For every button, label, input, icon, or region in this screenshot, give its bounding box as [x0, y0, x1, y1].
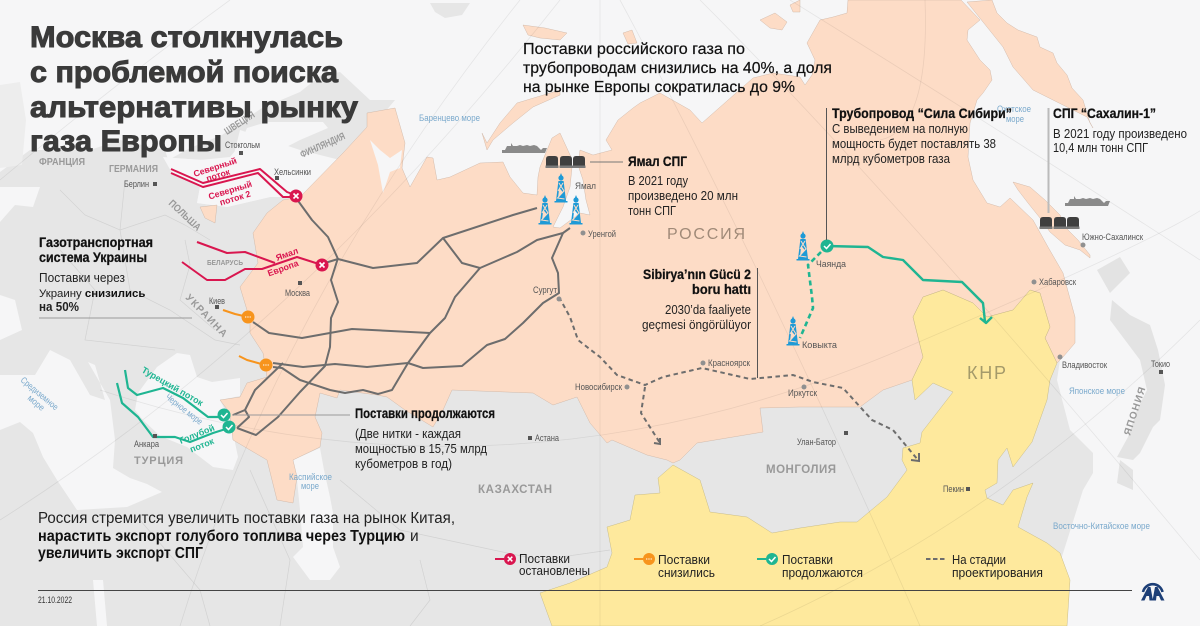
footer rule	[38, 590, 1132, 592]
sea labels: море	[26, 393, 47, 413]
icon: Yamal LNG tanks	[546, 156, 586, 168]
callout: Ukraine gas transport system: Поставки через	[39, 271, 125, 285]
callout: Sakhalin-1 LNG: СПГ “Сахалин-1”	[1053, 105, 1156, 121]
callout: Power of Siberia: Трубопровод “Сила Сибири”	[832, 105, 1012, 121]
status marker: Nord Stream stopped	[290, 190, 302, 202]
country and city labels: Астана	[535, 433, 559, 443]
country and city labels: РОССИЯ	[667, 226, 745, 243]
logo: Anadolu Agency	[1141, 584, 1164, 600]
title: альтернативы рынку	[30, 91, 358, 124]
sea labels	[19, 104, 1150, 531]
country and city labels: ТУРЦИЯ	[134, 455, 183, 467]
callout: Power of Siberia 2: Sibirya’nın Gücü 2	[643, 266, 751, 282]
country and city labels: Токио	[1151, 359, 1170, 369]
status marker: Yamal-Europe stopped	[316, 258, 328, 272]
headline statement on European market: трубопроводам снизились на 40%, а доля	[523, 60, 832, 77]
callout: Sakhalin-1 LNG	[1048, 105, 1187, 213]
callout: Power of Siberia 2	[642, 266, 758, 378]
sea labels: Средиземное	[19, 375, 60, 412]
callout: Power of Siberia: млрд кубометров газа	[832, 152, 950, 166]
headline statement on European market: Поставки российского газа по	[523, 41, 745, 58]
legend: supplies reduced	[634, 552, 715, 580]
callout: Power of Siberia	[826, 105, 1012, 240]
headline statement on European market: на рынке Европы сократилась до 9%	[523, 79, 795, 96]
sea labels: Каспийское	[289, 472, 332, 482]
country and city labels: Хельсинки	[274, 167, 311, 177]
country and city labels: Новосибирск	[575, 382, 622, 392]
status marker: Blue Stream continues	[222, 420, 236, 434]
gas pipelines network	[233, 198, 570, 435]
country and city labels: Москва	[285, 288, 310, 298]
country and city labels: Улан-Батор	[797, 437, 836, 447]
legend: supplies stopped: Поставки	[519, 551, 570, 566]
country and city labels: Владивосток	[1062, 360, 1107, 370]
icon: Sakhalin LNG tanks	[1040, 217, 1080, 229]
pipeline label: Nord Stream: поток	[205, 166, 232, 184]
icons: Yamal gas rigs	[538, 173, 582, 224]
pipeline label: Yamal-Europe: Ямал	[274, 246, 300, 263]
summary text block	[38, 510, 455, 562]
country and city labels: ЯПОНИЯ	[1122, 386, 1148, 437]
country and city labels: Анкара	[134, 439, 159, 449]
callout: Sakhalin-1 LNG: В 2021 году произведено	[1053, 127, 1187, 141]
country and city labels: Уренгой	[588, 229, 616, 239]
country and city labels: Южно-Сахалинск	[1082, 232, 1143, 242]
legend: design stage	[926, 552, 1043, 580]
country and city labels: Сургут	[533, 285, 557, 295]
legend: supplies stopped: остановлены	[519, 563, 590, 578]
status marker: Ukraine reduced south	[260, 358, 272, 372]
country and city labels: ФРАНЦИЯ	[39, 157, 85, 168]
country and city labels: КНР	[967, 363, 1006, 383]
Yamal-Europe pipelines	[182, 242, 322, 280]
callout: Yamal LNG: В 2021 году	[628, 174, 689, 188]
pipeline label: Blue Stream: Голубой	[178, 423, 216, 446]
callout: Ukraine gas transport system: на 50%	[39, 300, 79, 314]
callout: Ukraine gas transport system: система Украины	[39, 249, 147, 265]
callout: Power of Siberia: мощность будет поставлять 38	[832, 137, 996, 151]
country and city labels: УКРАИНА	[183, 292, 229, 340]
callout: Power of Siberia: С выведением на полную	[832, 122, 968, 136]
design stage pipeline: Power of Siberia 2	[559, 297, 919, 461]
country and city labels: Пекин	[943, 484, 964, 494]
Blue Stream pipeline	[117, 383, 229, 442]
pipeline label: TurkStream: Турецкий поток	[140, 365, 205, 408]
title: с проблемой поиска	[30, 56, 338, 89]
icons: Siberia gas rigs	[786, 231, 810, 346]
callout: Ukraine gas transport system: Газотранспортная	[39, 234, 153, 250]
Ukraine orange pipelines	[223, 310, 265, 365]
callout: Power of Siberia 2: 2030’da faaliyete	[665, 303, 751, 317]
callout: supplies continue: мощностью в 15,75 млрд	[355, 442, 488, 456]
country and city labels	[39, 110, 1170, 496]
Nord Stream pipelines	[171, 169, 295, 197]
sea labels: Охотское	[997, 104, 1031, 114]
country and city labels: ГЕРМАНИЯ	[109, 164, 158, 175]
callout: Power of Siberia 2: boru hattı	[692, 281, 751, 297]
country and city labels: ПОЛЬША	[166, 198, 203, 233]
country and city labels: ШВЕЦИЯ	[223, 110, 257, 138]
legend: design stage: проектирования	[952, 565, 1043, 580]
callout: Yamal LNG	[590, 153, 738, 218]
summary text block: нарастить экспорт голубого топлива через Турцию	[38, 528, 405, 545]
country and city labels: Красноярск	[708, 358, 750, 368]
map: China territory	[540, 290, 1070, 626]
title: Москва столкнулась	[30, 21, 343, 54]
legend: supplies stopped	[495, 551, 590, 578]
TurkStream pipeline	[125, 370, 224, 417]
callout: Ukraine gas transport system	[39, 234, 192, 318]
map: Russia territory	[200, 0, 1093, 503]
country and city labels: Чаянда	[816, 259, 846, 269]
sea labels: Баренцево море	[419, 113, 480, 123]
pipeline label: Blue Stream: поток	[188, 436, 216, 455]
callout: supplies continue: (Две нитки - каждая	[355, 427, 461, 441]
status marker: TurkStream continues	[218, 408, 230, 422]
callout: supplies continue: Поставки продолжаются	[355, 405, 495, 421]
country and city labels: ФИНЛЯНДИЯ	[299, 131, 347, 161]
callout: Yamal LNG: произведено 20 млн	[628, 189, 738, 203]
summary text block: и	[410, 528, 419, 545]
country and city labels: Ковыкта	[802, 340, 837, 350]
icon: Yamal LNG tanker	[502, 143, 547, 153]
callout: Ukraine gas transport system: Украину снизились	[39, 288, 145, 300]
country and city labels: Берлин	[124, 179, 149, 189]
callout: Sakhalin-1 LNG: 10,4 млн тонн СПГ	[1053, 141, 1148, 155]
callout: Power of Siberia 2: geçmesi öngörülüyor	[642, 318, 751, 332]
sea labels: Черное море	[164, 392, 205, 427]
callout: Yamal LNG: Ямал СПГ	[628, 153, 687, 169]
title: газа Европы	[30, 125, 222, 158]
summary text block: Россия стремится увеличить поставки газа на рынок Китая,	[38, 510, 455, 527]
sea labels: море	[1006, 114, 1024, 124]
pipeline label: Nord Stream 2: Северный	[207, 179, 253, 201]
sea labels: Японское море	[1069, 386, 1125, 396]
pipeline label: Nord Stream 2: поток 2	[218, 189, 252, 208]
title	[30, 21, 358, 158]
callout: supplies continue: кубометров в год)	[355, 457, 452, 471]
pipeline label: Yamal-Europe: Европа	[266, 258, 300, 278]
country and city labels: Иркутск	[788, 388, 817, 398]
country and city labels: МОНГОЛИЯ	[766, 464, 836, 476]
legend: supplies continue: продолжаются	[782, 565, 863, 580]
legend: supplies continue: Поставки	[782, 552, 833, 567]
legend: supplies continue	[757, 552, 863, 580]
legend: supplies reduced: снизились	[658, 565, 715, 580]
country and city labels: БЕЛАРУСЬ	[207, 258, 244, 267]
country and city labels: КАЗАХСТАН	[478, 484, 552, 496]
callout: Yamal LNG: тонн СПГ	[628, 204, 676, 218]
country and city labels: Ямал	[575, 181, 596, 191]
status marker: Ukraine reduced north	[242, 310, 254, 324]
pipeline label: Yamal-Europe	[266, 246, 300, 278]
sea labels: море	[301, 481, 319, 491]
date: 21.10.2022	[38, 595, 72, 605]
legend: design stage: На стадии	[952, 552, 1006, 567]
legend: supplies reduced: Поставки	[658, 552, 710, 567]
Power of Siberia pipeline	[827, 246, 992, 323]
status marker: Power of Siberia continues	[820, 240, 834, 252]
country and city labels: Стокгольм	[225, 140, 260, 150]
pipeline label: Nord Stream: Северный	[192, 155, 238, 179]
country and city labels: Хабаровск	[1039, 277, 1076, 287]
sea labels: Восточно-Китайское море	[1053, 521, 1150, 531]
country and city labels: Киев	[209, 296, 225, 306]
headline statement on European market	[523, 41, 832, 96]
icon: Sakhalin LNG tanker	[1065, 196, 1110, 206]
callout: supplies continue	[232, 405, 495, 471]
summary text block: увеличить экспорт СПГ	[38, 545, 203, 562]
Kovykta dashed pipeline	[800, 252, 821, 338]
